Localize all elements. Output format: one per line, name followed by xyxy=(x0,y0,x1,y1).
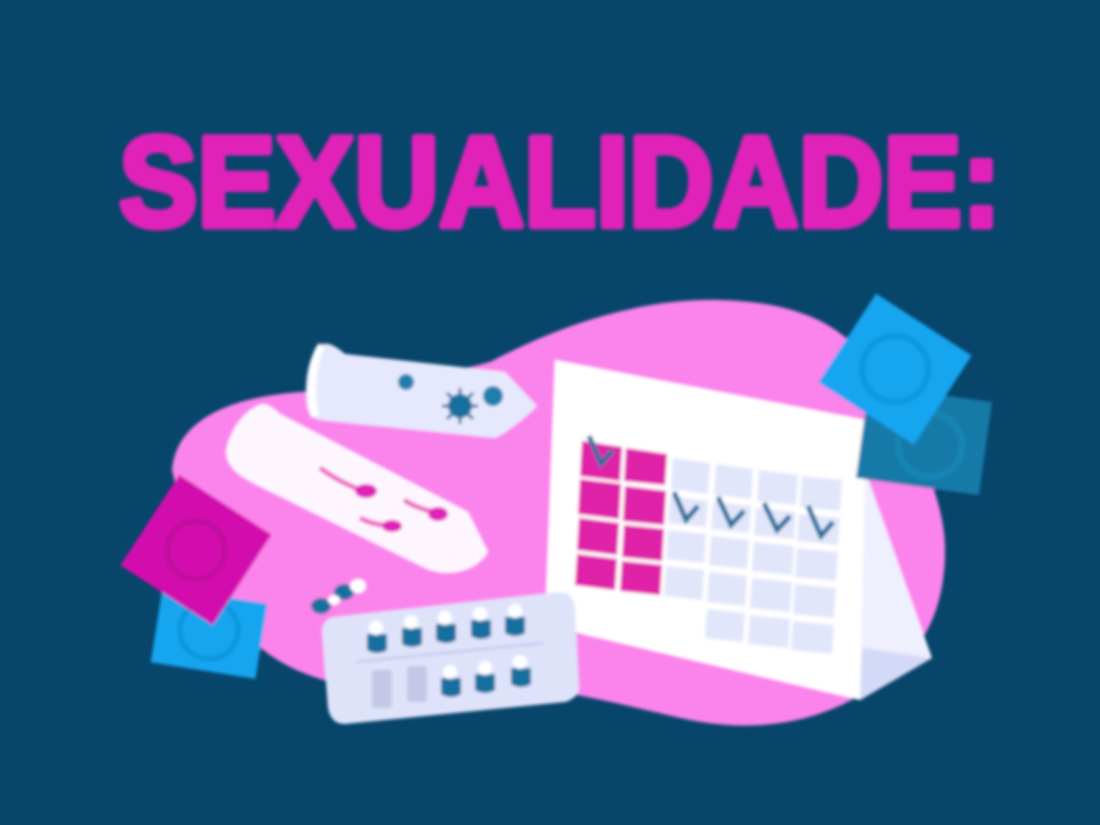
empty blister slots xyxy=(372,666,427,708)
calendar page xyxy=(545,360,866,700)
check marks xyxy=(589,436,833,536)
magenta period days xyxy=(575,441,667,595)
illustration xyxy=(120,294,992,726)
loose pills xyxy=(311,579,366,614)
pink blob background xyxy=(172,300,945,726)
condom packet: cyan right xyxy=(818,294,972,444)
test tube: sperm xyxy=(226,404,488,573)
pale calendar days xyxy=(664,458,842,654)
title: SEXUALIDADE: xyxy=(119,111,1001,254)
condom packet: cyan lower left xyxy=(151,587,267,679)
test tube: bacteria xyxy=(306,344,537,438)
condom packet: dark teal right xyxy=(856,385,992,495)
condom packet: magenta left xyxy=(120,475,272,625)
pill blister pack xyxy=(322,592,579,724)
calendar stand xyxy=(850,470,932,700)
